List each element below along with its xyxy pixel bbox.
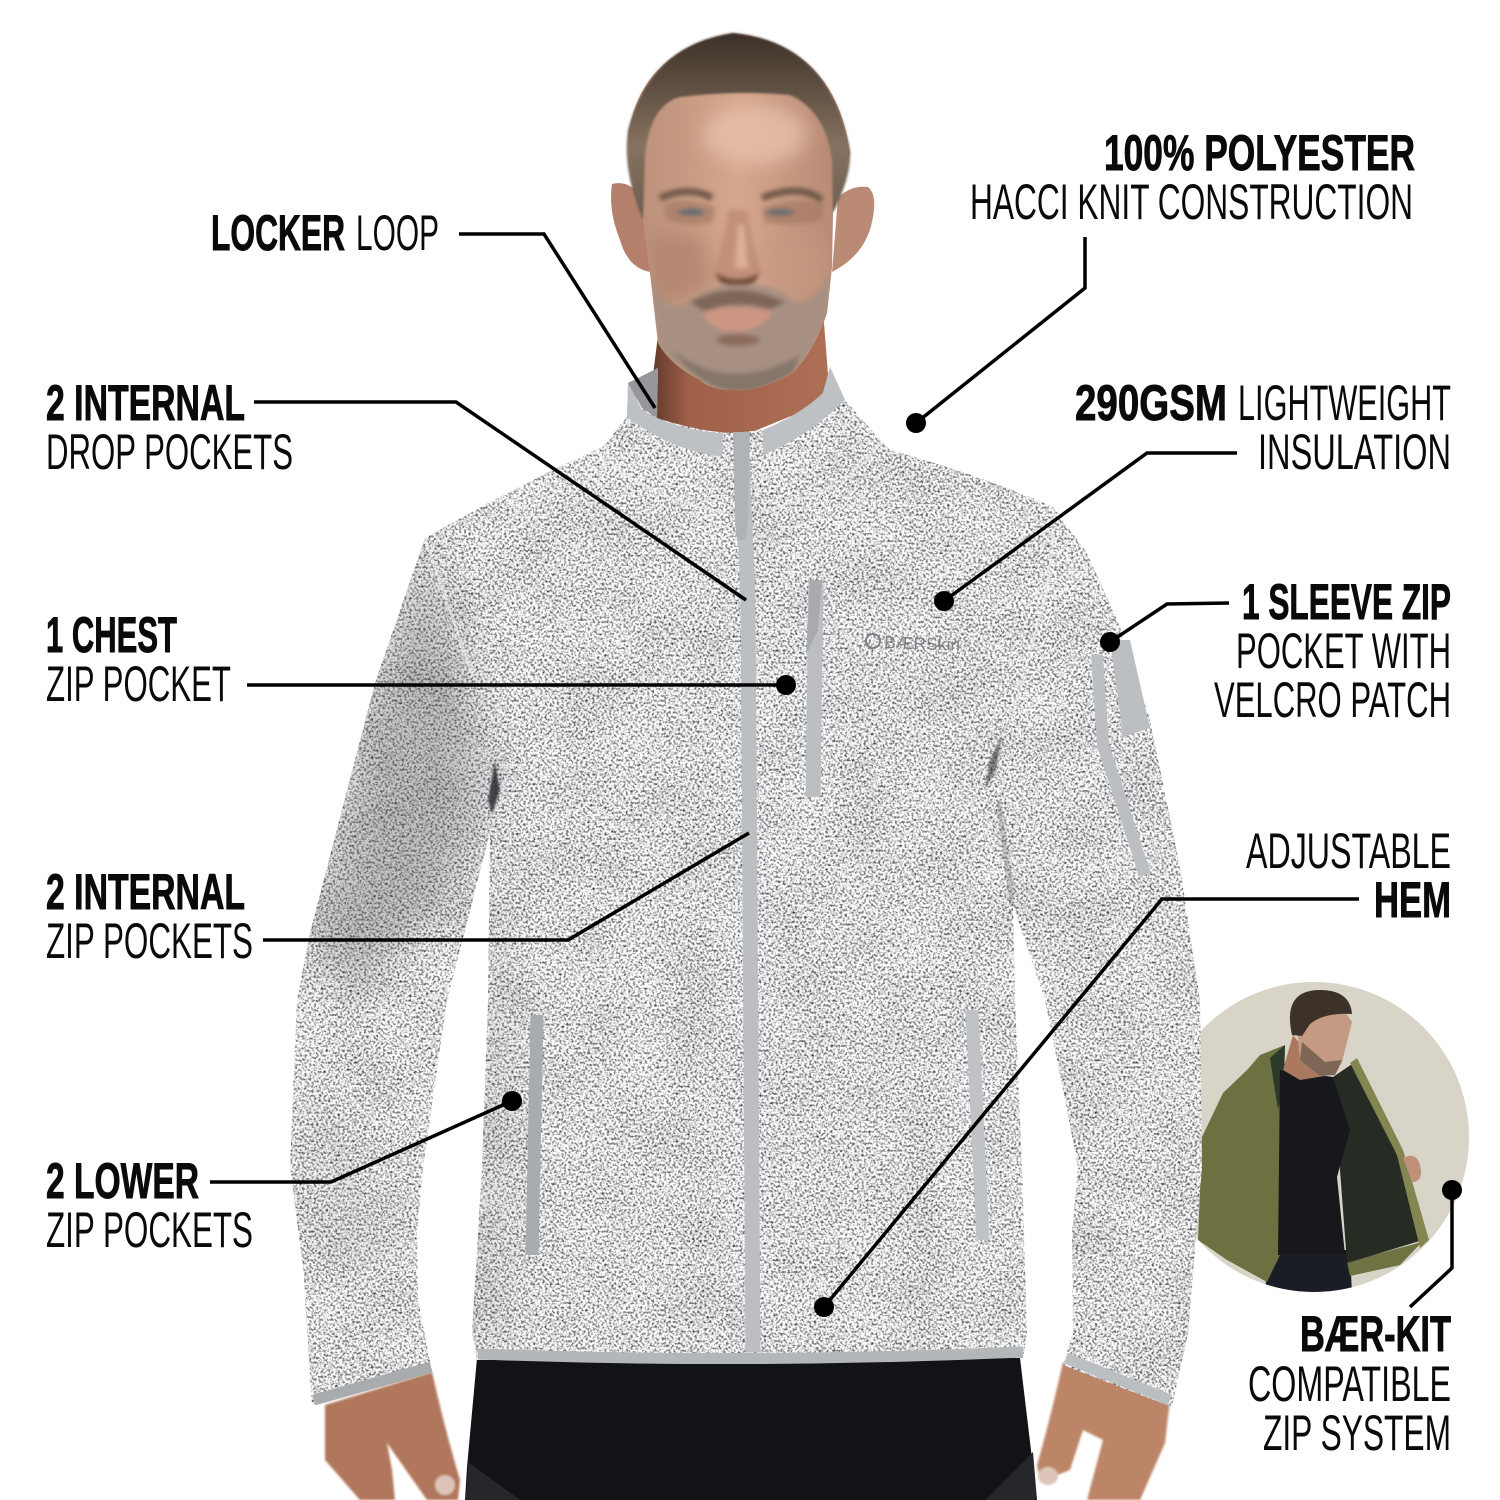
- right hand: [1037, 1362, 1170, 1500]
- heading: 2 INTERNAL: [46, 375, 245, 431]
- inset neck: [1283, 1035, 1325, 1080]
- jacket: [280, 360, 1220, 1410]
- chest zip: [813, 580, 816, 797]
- callout: adjustable hem: [814, 823, 1451, 1317]
- main zipper: [741, 435, 753, 1352]
- description: ZIP POCKETS: [46, 913, 253, 969]
- photo: man wearing jacket: [280, 33, 1220, 1500]
- marker: [1442, 1180, 1462, 1200]
- left armpit: [488, 760, 500, 815]
- label light: LOOP: [356, 205, 439, 261]
- face shading: [650, 105, 832, 392]
- callout: chest zip pocket: [46, 607, 796, 712]
- callout: baer-kit compatible: [1248, 1180, 1462, 1461]
- collar lining left: [627, 383, 723, 457]
- heading: 1 CHEST: [46, 607, 177, 663]
- inset head: [1296, 1012, 1352, 1076]
- arm fold line right: [998, 800, 1013, 905]
- left cuff: [314, 1367, 431, 1400]
- neck: [650, 310, 830, 440]
- description: DROP POCKETS: [46, 424, 293, 480]
- left cheek shade: [650, 235, 712, 305]
- hair: [627, 33, 850, 220]
- trousers: [465, 1358, 1037, 1500]
- left body edge shadow: [470, 830, 520, 1350]
- beard lower: [676, 354, 800, 390]
- label bold: 290GSM: [1075, 375, 1227, 431]
- marker: [1100, 632, 1120, 652]
- right fingernail: [1038, 1467, 1058, 1485]
- eyes: [676, 208, 796, 216]
- marker: [776, 675, 796, 695]
- inset jacket body: [1198, 1045, 1285, 1282]
- trouser zip left: [466, 1462, 520, 1500]
- knit texture: [280, 360, 1220, 1410]
- left hand: [325, 1372, 460, 1500]
- leader line: [1410, 1190, 1452, 1307]
- inset trousers: [1265, 1250, 1352, 1295]
- inset jacket collar: [1270, 1045, 1285, 1110]
- hem: [478, 1352, 1023, 1359]
- callout: internal zip pockets: [46, 833, 749, 969]
- upper left sleeve shadow: [310, 538, 490, 1000]
- leader line: [459, 234, 655, 408]
- chest logo: BÆRSkin: [884, 633, 960, 655]
- left ear: [611, 183, 650, 272]
- sleeve patch: [1110, 640, 1150, 737]
- sleeve zip: [1097, 655, 1145, 875]
- leader line: [1110, 603, 1229, 642]
- right ear: [832, 187, 874, 272]
- right cuff: [1066, 1358, 1170, 1400]
- trouser zip right: [985, 1452, 1037, 1500]
- callout: 290gsm insulation: [934, 375, 1451, 611]
- inset hair: [1290, 990, 1352, 1036]
- marker: [934, 591, 954, 611]
- inset jacket lower lining edge: [1347, 1242, 1422, 1276]
- nose shadow: [714, 272, 760, 286]
- heading: HEM: [1374, 872, 1451, 928]
- face: [628, 33, 850, 390]
- left fingernail: [435, 1475, 455, 1495]
- inset beard: [1300, 1042, 1342, 1076]
- inset jacket lining: [1333, 1060, 1423, 1263]
- right armpit: [985, 735, 1002, 790]
- collar lining right: [763, 367, 845, 455]
- callout: 100% polyester: [906, 125, 1415, 433]
- forehead highlight: [703, 105, 807, 165]
- eye sockets: [664, 201, 824, 225]
- nose highlight: [735, 225, 748, 268]
- lower sleeve shadow: [302, 1122, 408, 1268]
- right cheek shade: [770, 240, 832, 300]
- collar seams: [425, 443, 1053, 713]
- marker: [906, 413, 926, 433]
- inset tee: [1278, 1070, 1350, 1255]
- leader line: [247, 683, 786, 687]
- marker: [814, 1297, 834, 1317]
- inner collar: [628, 368, 658, 418]
- leader line: [944, 453, 1237, 601]
- jacket shading: [300, 538, 1013, 1350]
- leader line: [824, 899, 1359, 1307]
- marker: [502, 1091, 522, 1111]
- logo mark: [866, 634, 880, 648]
- leader line: [210, 1101, 512, 1182]
- inset background: [1196, 982, 1469, 1292]
- moustache: [690, 290, 785, 312]
- left hand shape: [325, 1372, 460, 1500]
- right hand shape: [1037, 1362, 1170, 1500]
- callout: locker loop: [211, 205, 655, 408]
- brows: [660, 191, 822, 200]
- beard: [654, 275, 831, 386]
- mouth: [702, 307, 773, 331]
- nose: [716, 209, 760, 278]
- zipper pull: [733, 432, 750, 540]
- callout: sleeve zip: [1100, 574, 1451, 728]
- callout: lower zip pockets: [46, 1091, 522, 1258]
- leader line: [263, 833, 749, 940]
- leader line: [254, 402, 746, 600]
- lower left zip: [532, 1015, 537, 1255]
- label bold: LOCKER: [211, 205, 345, 261]
- leader line: [916, 237, 1085, 423]
- description: ZIP POCKET: [46, 656, 231, 712]
- heading: 2 INTERNAL: [46, 864, 245, 920]
- lower right zip: [972, 1010, 983, 1240]
- inset photo: jacket compatibility: [1196, 982, 1469, 1292]
- head: [611, 33, 874, 392]
- heading: 2 LOWER: [46, 1153, 199, 1209]
- inset hand: [1403, 1156, 1421, 1182]
- description: ZIP POCKETS: [46, 1202, 253, 1258]
- chin shadow: [716, 334, 760, 346]
- callout: internal drop pockets: [46, 375, 746, 600]
- inset jacket open panel: [1350, 1058, 1429, 1248]
- chest zip pull: [806, 580, 822, 655]
